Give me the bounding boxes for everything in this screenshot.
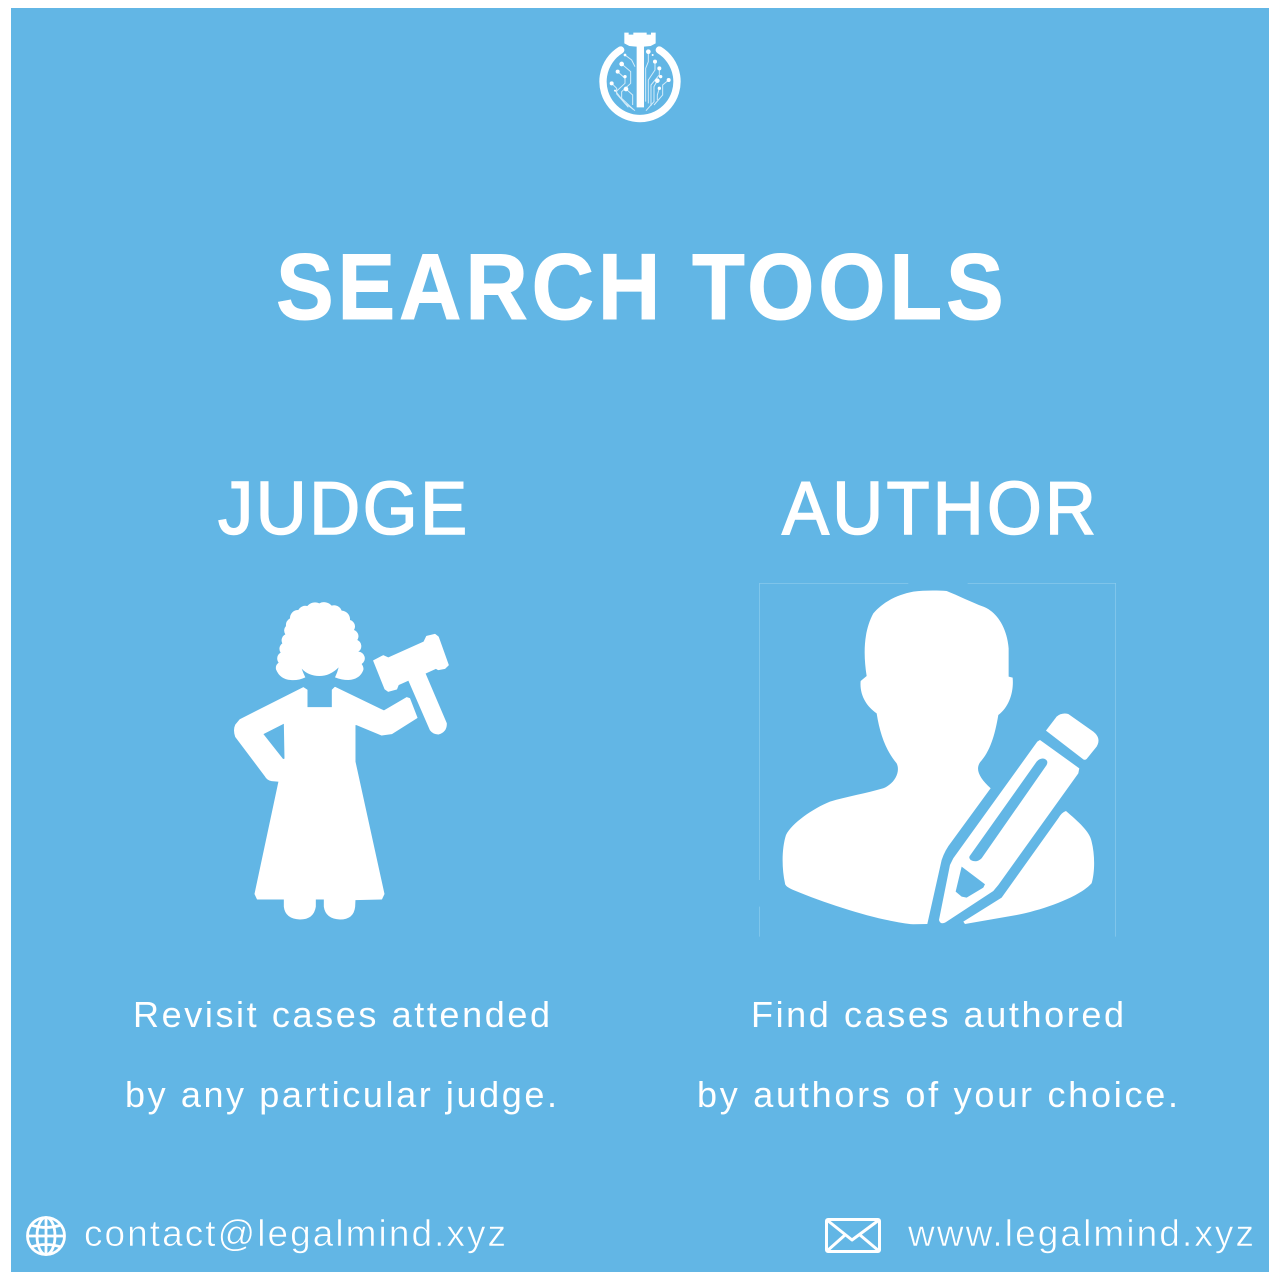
description: judge [125, 994, 557, 1115]
footer: website [826, 1213, 1254, 1254]
heading: judge: JUDGE [218, 467, 467, 550]
icon: judge with gavel [234, 602, 448, 919]
description: judge: by any particular judge. [125, 1074, 557, 1115]
description: author: by authors of your choice. [697, 1074, 1178, 1115]
panel: author [697, 467, 1178, 1115]
icon: author with pencil [759, 583, 1116, 937]
website url: www.legalmind.xyz [907, 1213, 1254, 1254]
heading: author: AUTHOR [782, 467, 1096, 550]
footer: contact [28, 1213, 506, 1254]
icon: globe [28, 1218, 64, 1254]
description: judge: Revisit cases attended [133, 994, 550, 1035]
icon: legal mind logo [603, 33, 677, 119]
icon: envelope [826, 1220, 880, 1252]
title: SEARCH TOOLS [276, 235, 1004, 340]
panel: judge [125, 467, 557, 1115]
description: author [697, 994, 1178, 1115]
contact email: contact@legalmind.xyz [84, 1213, 506, 1254]
description: author: Find cases authored [751, 994, 1124, 1035]
